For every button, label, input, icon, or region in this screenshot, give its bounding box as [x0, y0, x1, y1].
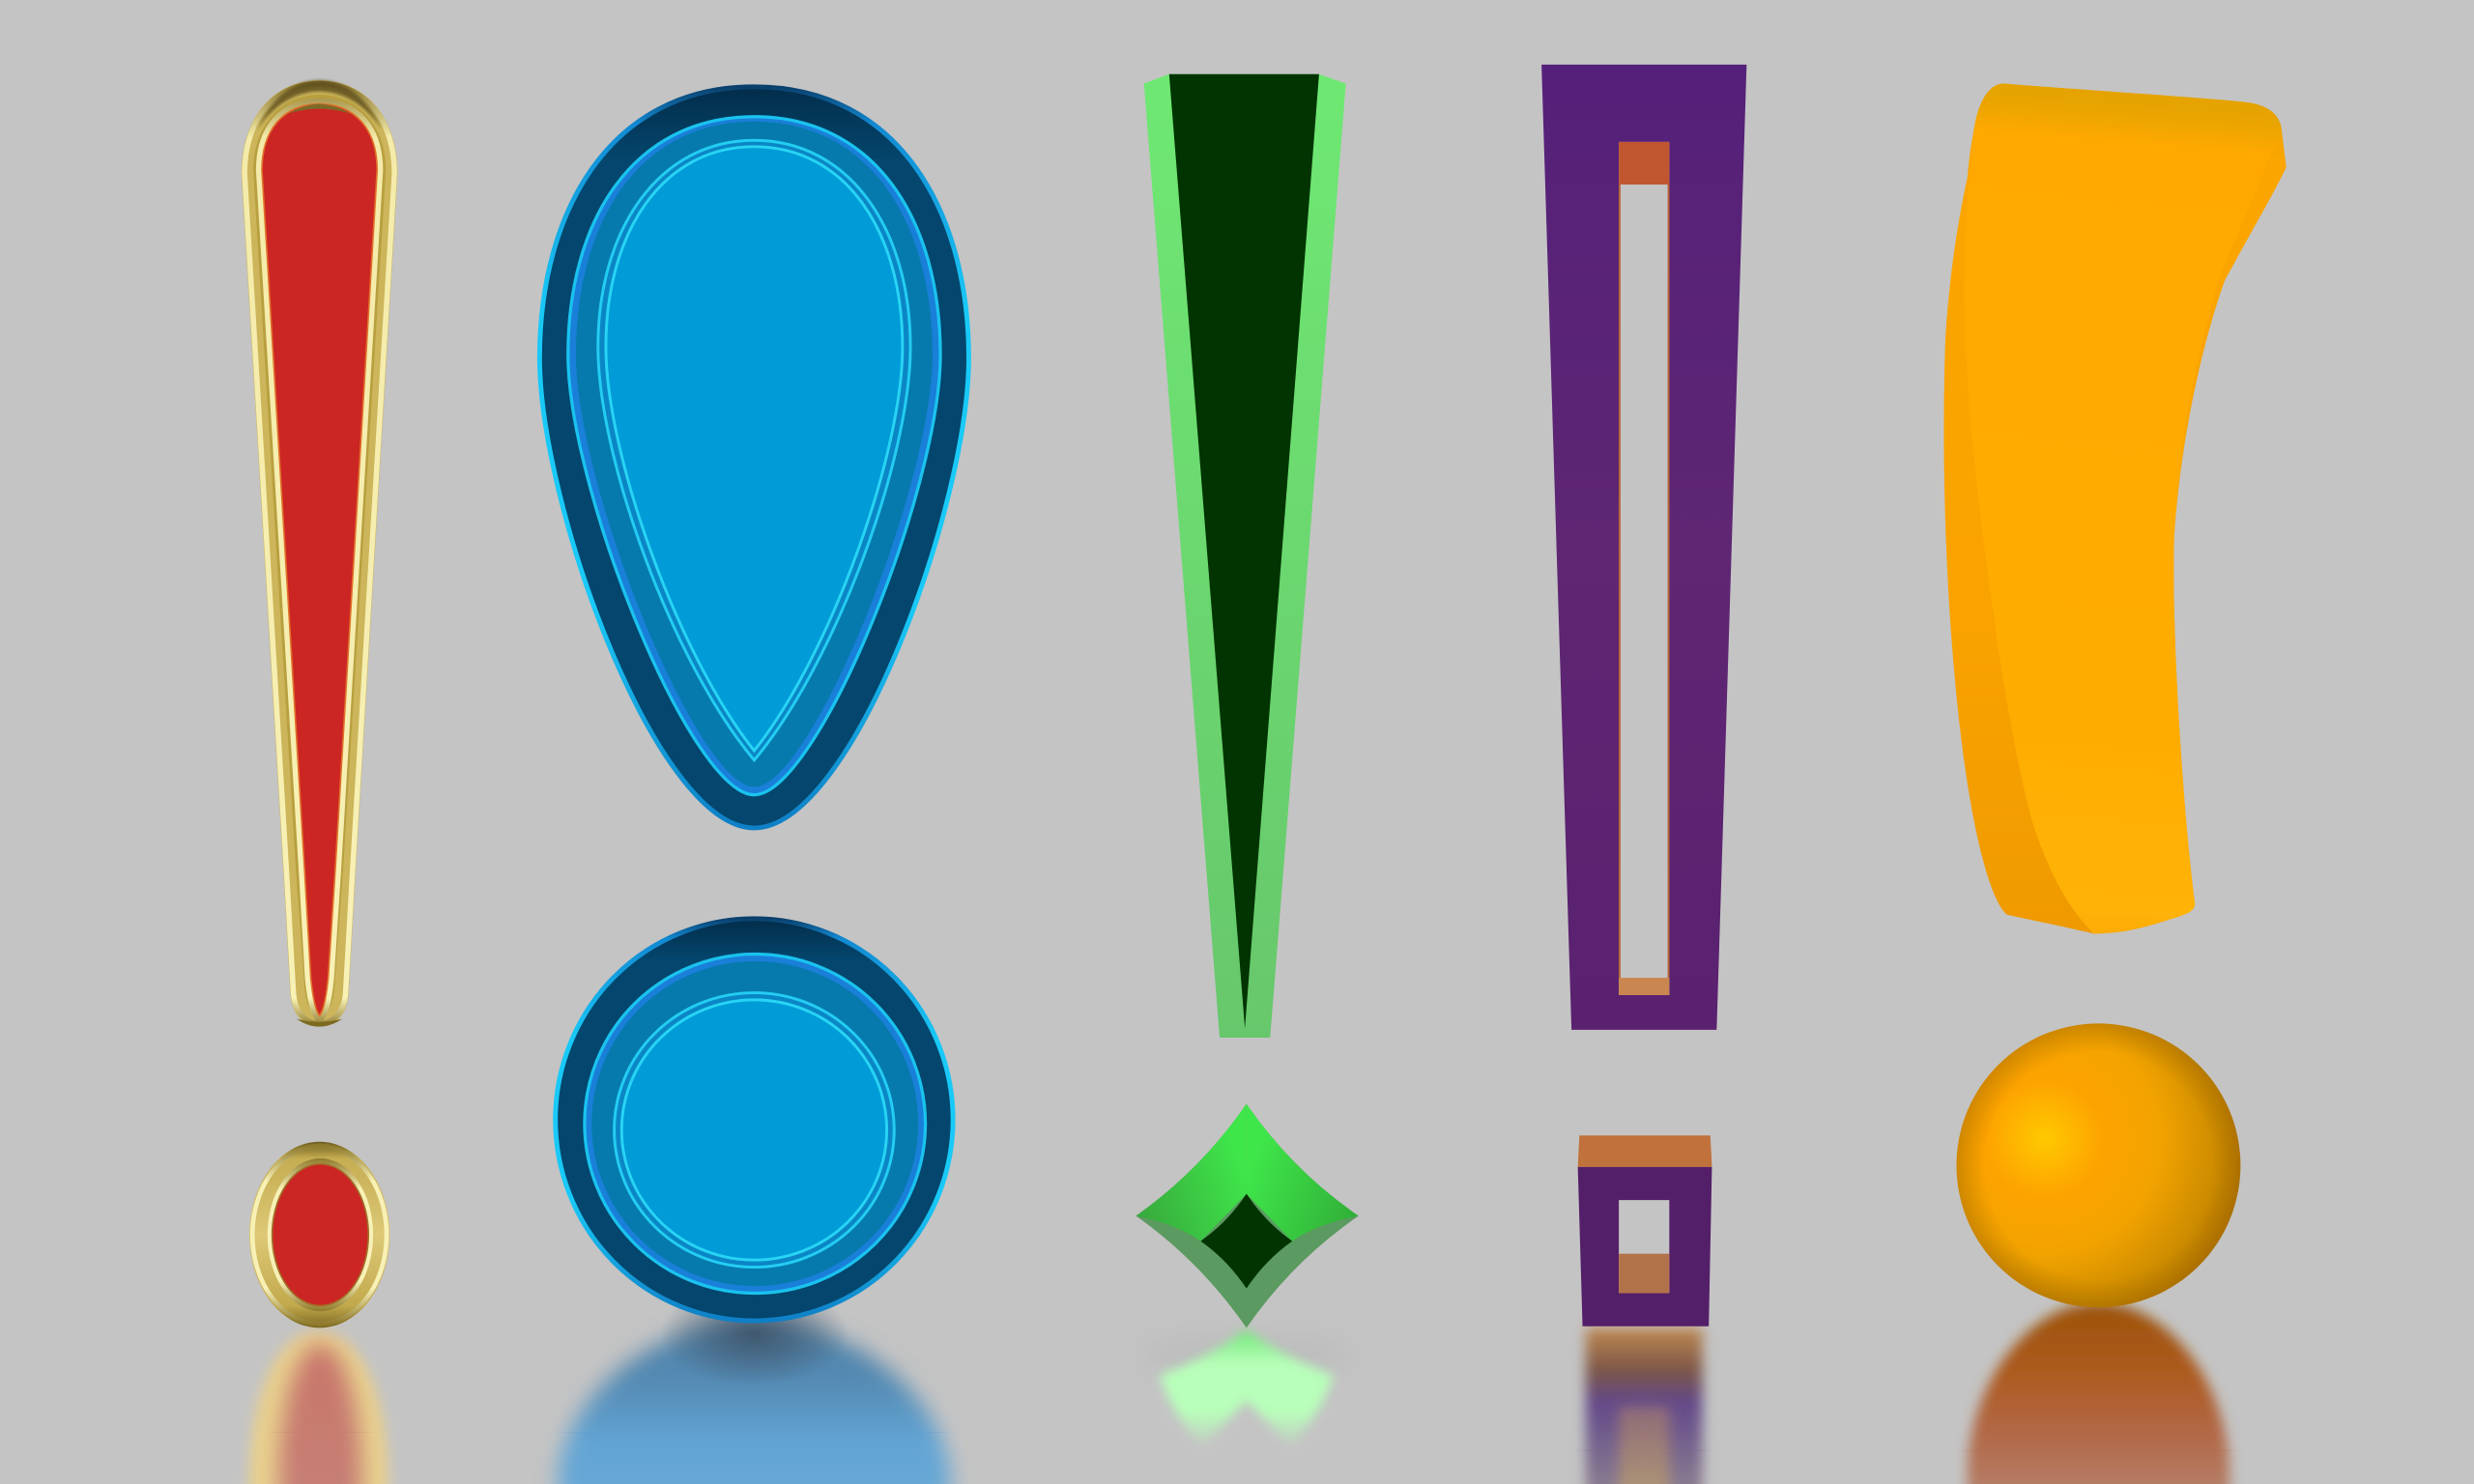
reflection [1586, 1327, 1703, 1484]
exclamation mark: blue [539, 87, 968, 1484]
exclamation mark: red and gold [242, 80, 397, 1484]
reflection [559, 1282, 950, 1484]
reflection [1968, 1302, 2229, 1484]
blue dot [556, 919, 953, 1321]
orange bar [1943, 84, 2287, 933]
green diamond [1136, 1104, 1359, 1327]
green wedge [1144, 74, 1346, 1038]
gold dot [249, 1142, 389, 1327]
exclamation mark: orange [1943, 84, 2287, 1484]
purple bar with slot [1541, 65, 1746, 1030]
exclamation mark: green [1136, 74, 1359, 1446]
orange sphere [1956, 1023, 2240, 1307]
reflection [249, 1331, 388, 1484]
exclamation mark: purple [1541, 65, 1746, 1484]
red bar with gold rim [242, 80, 397, 1027]
purple box dot [1578, 1135, 1712, 1327]
blue teardrop [539, 87, 968, 828]
reflection [1139, 1329, 1354, 1446]
